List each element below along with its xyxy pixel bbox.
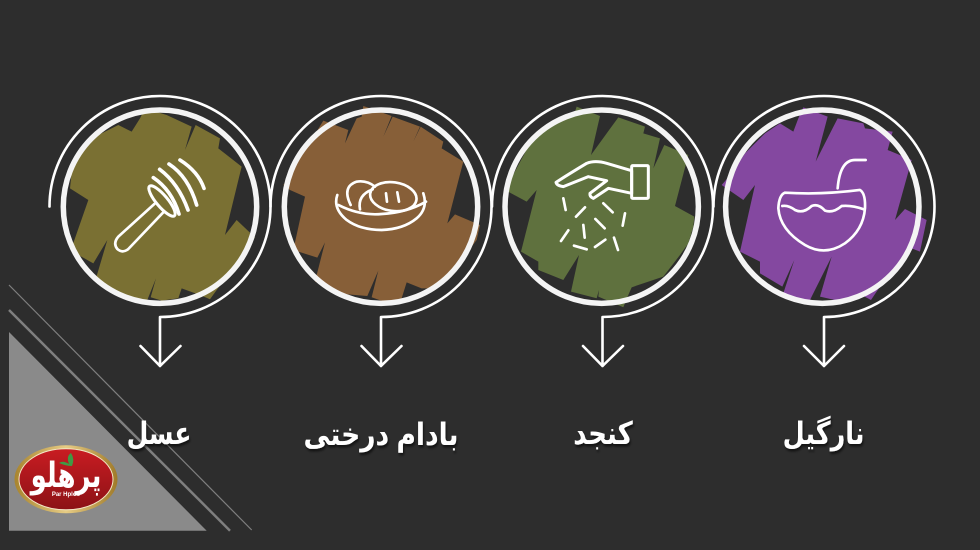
colour blob: almond brown xyxy=(283,106,480,303)
icon: coconut drink xyxy=(778,160,866,250)
logo leaf xyxy=(59,453,73,466)
colour blob: honey olive xyxy=(70,108,255,301)
outer arc with arrow xyxy=(50,96,270,366)
label: coconut: نارگیل xyxy=(783,416,864,452)
icon: honey dipper xyxy=(115,160,204,251)
logo latin name: Par Hploo xyxy=(52,492,80,498)
outer arc with arrow xyxy=(270,96,492,366)
outer arc with arrow xyxy=(492,96,713,366)
item 2: tree almond xyxy=(270,96,492,366)
label: honey: عسل xyxy=(127,415,191,451)
logo wordmark: پرهلو xyxy=(29,455,101,496)
item 3: sesame xyxy=(492,96,713,366)
colour blob: coconut purple xyxy=(722,107,927,305)
label: sesame: کنجد xyxy=(573,417,633,452)
colour blob: sesame green xyxy=(505,107,694,307)
logo xyxy=(14,445,118,513)
item 4: coconut xyxy=(714,96,935,366)
inner ring xyxy=(505,110,698,303)
inner ring xyxy=(284,110,478,303)
icon: hand sprinkling seeds xyxy=(556,162,648,250)
icon: nuts in a bowl xyxy=(336,179,426,230)
label: tree almond: بادام درختی xyxy=(304,418,458,453)
outer arc with arrow xyxy=(714,96,935,366)
inner ring xyxy=(63,110,257,303)
corner triangle xyxy=(9,332,207,531)
inner ring xyxy=(726,110,919,303)
item 1: honey xyxy=(50,96,270,366)
